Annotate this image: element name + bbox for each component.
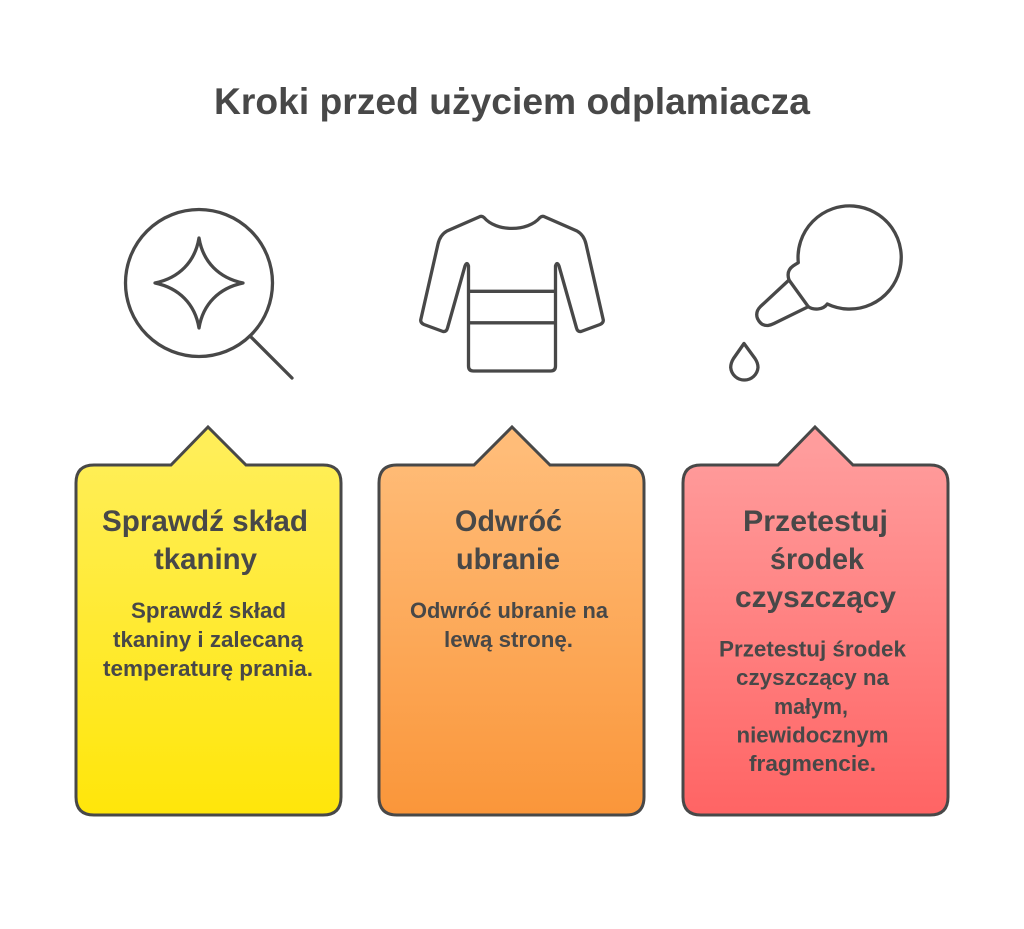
icon: inside-out shirt <box>421 216 603 371</box>
panel description: fragmencie. <box>749 751 876 776</box>
panel description: niewidocznym <box>736 722 888 748</box>
panel: Przetestuj środek czyszczący <box>683 427 948 815</box>
panel heading: Odwróć <box>455 505 562 538</box>
panel heading: ubranie <box>456 543 560 576</box>
panel heading <box>455 505 562 576</box>
panel heading: Sprawdź skład <box>102 505 308 538</box>
panel description: Przetestuj środek <box>719 636 907 662</box>
panel: Odwróć ubranie <box>379 427 644 815</box>
panel description: Odwróć ubranie na <box>410 598 609 623</box>
panel: Sprawdź skład tkaniny <box>76 427 341 815</box>
panel heading: czyszczący <box>735 581 896 614</box>
title: Kroki przed użyciem odplamiacza <box>214 81 810 122</box>
icon: magnifying glass with sparkle <box>126 210 292 378</box>
panel heading <box>102 505 308 576</box>
panel heading: Przetestuj <box>743 505 888 538</box>
panel heading <box>735 505 896 614</box>
panel description <box>103 598 313 681</box>
panel description: czyszczący na <box>736 665 890 690</box>
panel description <box>719 636 907 776</box>
panel heading: tkaniny <box>154 543 257 576</box>
panel description: Sprawdź skład <box>131 598 286 623</box>
panel description: temperaturę prania. <box>103 656 313 681</box>
icon: dropper with drop <box>731 206 901 380</box>
panel description: lewą stronę. <box>444 627 573 652</box>
panel description: tkaniny i zalecaną <box>113 627 304 652</box>
panel description <box>410 598 609 652</box>
panel heading: środek <box>770 543 864 576</box>
panel description: małym, <box>774 694 848 719</box>
